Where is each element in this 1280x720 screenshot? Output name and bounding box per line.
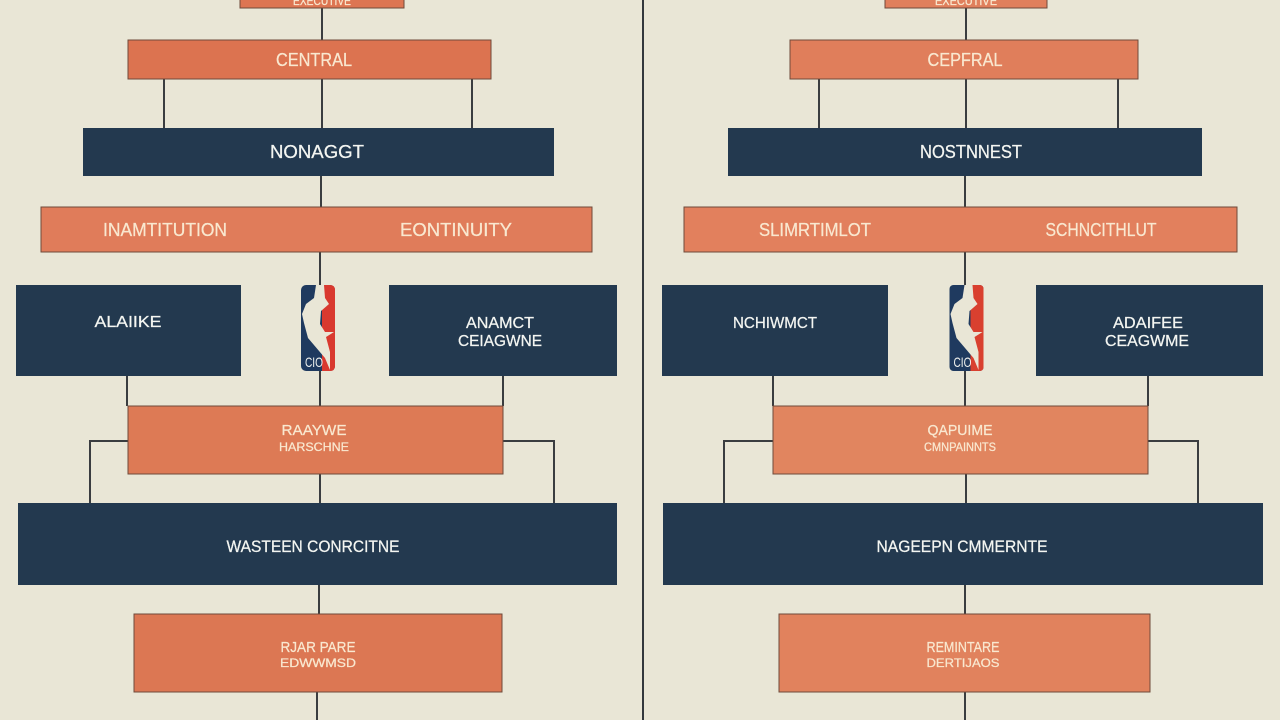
navy box: division right side: ADAIFEE [1113, 315, 1183, 332]
wide orange box left: EONTINUITY [400, 220, 512, 240]
navy box: division right side: CEAGWME [1105, 333, 1189, 350]
navy box: division right: ANAMCT [466, 315, 534, 332]
navy box: manager left [83, 128, 554, 176]
navy box: division left: ALAIIKE [94, 314, 162, 331]
navy box: division right: CEIAGWNE [458, 333, 542, 350]
central box right [790, 40, 1138, 79]
icon: league logo right [950, 285, 984, 371]
orange box: bottom left [134, 614, 502, 692]
navy box: western conference [18, 503, 617, 585]
orange box: bottom left: RJAR PARE [280, 639, 356, 656]
wide orange box right: SCHNCITHLUT [1046, 220, 1156, 240]
icon: league logo left [301, 285, 335, 371]
orange box: conference left: HARSCHNE [279, 440, 349, 454]
orange box: bottom left: EDWWMSD [280, 656, 356, 670]
central box left [128, 40, 491, 79]
top box left [240, 0, 404, 8]
navy box: division left [16, 285, 241, 376]
navy box: eastern conference: NAGEEPN CMMERNTE [876, 537, 1048, 556]
icon: league logo left: CIO [305, 354, 323, 370]
center divider [642, 0, 644, 720]
wide orange box right [684, 207, 1237, 252]
navy box: western conference: WASTEEN CONRCITNE [226, 537, 400, 556]
orange box: conference left [128, 406, 503, 474]
navy box: division left side: NCHIWMCT [733, 315, 817, 332]
navy box: manager left: NONAGGT [270, 142, 364, 162]
wide orange box left: INAMTITUTION [103, 220, 227, 240]
panel: right hierarchy [662, 0, 1263, 720]
connector lines right [724, 8, 1198, 720]
navy box: eastern conference [663, 503, 1263, 585]
navy box: division left side [662, 285, 888, 376]
icon: league logo right: CIO [954, 354, 972, 370]
wide orange box right: SLIMRTIMLOT [759, 220, 871, 240]
navy box: division right [389, 285, 617, 376]
orange box: bottom right: DERTIJAOS [926, 656, 1000, 670]
central box right: CEPFRAL [928, 50, 1002, 70]
orange box: conference right: QAPUIME [928, 422, 992, 439]
connector lines left [90, 8, 554, 720]
orange box: conference left: RAAYWE [282, 422, 346, 439]
orange box: conference right [773, 406, 1148, 474]
orange box: conference right: CMNPAINNTS [924, 440, 996, 454]
wide orange box left [41, 207, 592, 252]
navy box: manager right: NOSTNNEST [920, 142, 1022, 162]
orange box: bottom right [779, 614, 1150, 692]
panel: left hierarchy [16, 0, 617, 720]
navy box: division right side [1036, 285, 1263, 376]
top box right [885, 0, 1047, 8]
orange box: bottom right: REMINTARE [926, 639, 1000, 656]
navy box: manager right [728, 128, 1202, 176]
central box left: CENTRAL [276, 50, 352, 70]
